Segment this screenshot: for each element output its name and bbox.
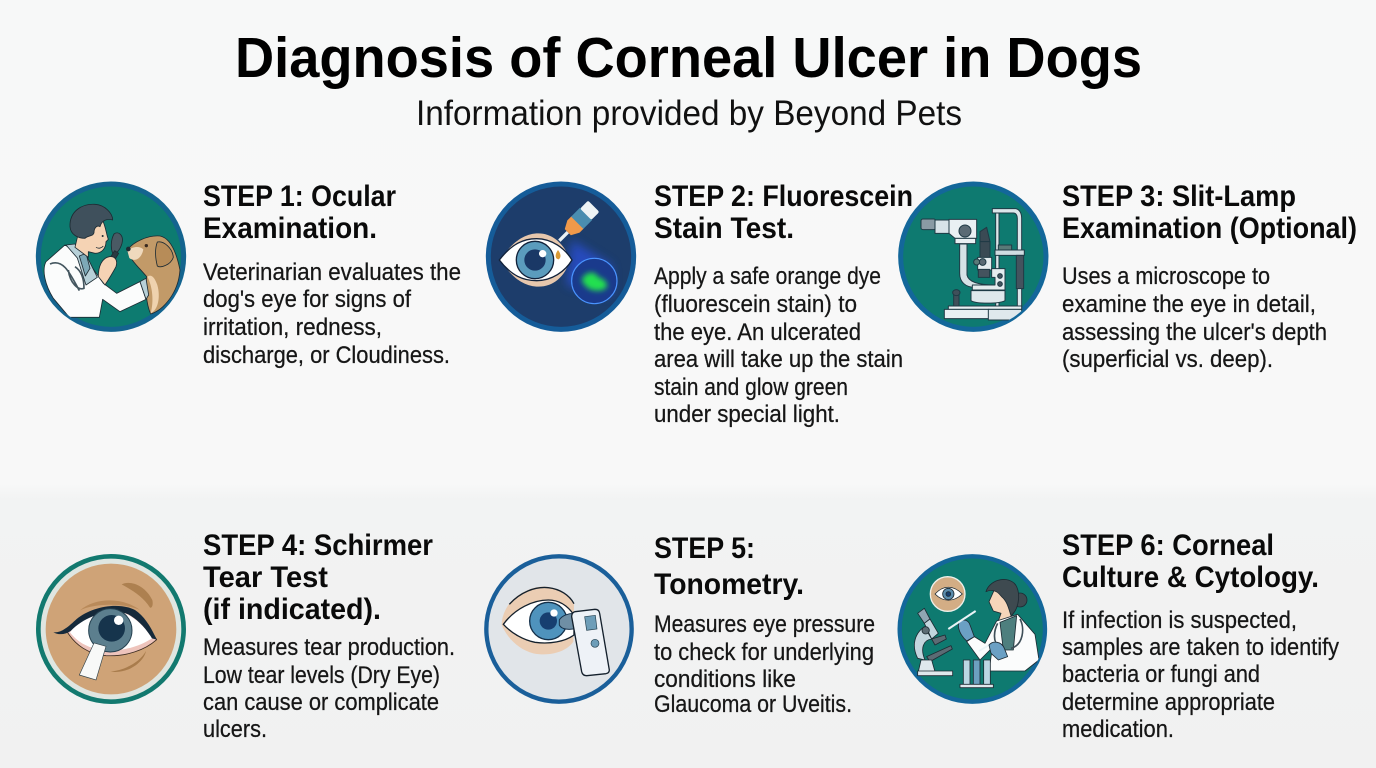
icon: lab scientist with microscope	[900, 556, 1045, 702]
text: step 5 body: Glaucoma or Uveitis.	[654, 691, 852, 718]
text: step 6 body: determine appropriate	[1062, 689, 1275, 716]
panel: step 3: Examination (Optional)	[1062, 212, 1357, 245]
text: step 4 body	[203, 634, 455, 743]
icon: Schirmer tear test	[38, 556, 184, 702]
text: step 1 body	[203, 259, 461, 369]
text: step 3 body	[1062, 263, 1327, 373]
icon: lab microscope	[914, 608, 953, 676]
text: step 4 body: Measures tear production.	[203, 634, 455, 661]
text: step 2 body: (fluorescein stain) to	[654, 291, 857, 318]
text: step 1 body: dog's eye for signs of	[203, 286, 411, 313]
panel: step 1: Examination.	[203, 212, 377, 245]
text: step 3 body: assessing the ulcer's depth	[1062, 319, 1327, 346]
text: step 4 body: Low tear levels (Dry Eye)	[203, 662, 440, 689]
text: step 1 body: irritation, redness,	[203, 314, 382, 341]
heading: step 3: STEP 3: Slit-Lamp	[1062, 180, 1296, 213]
text: step 2 body	[654, 263, 903, 428]
text: step 6 body	[1062, 607, 1339, 743]
text: step 5 body: to check for underlying	[654, 639, 874, 666]
text: step 5 body	[654, 611, 875, 718]
text: step 1 body: discharge, or Cloudiness.	[203, 342, 450, 369]
panel: step 2: Stain Test.	[654, 212, 794, 245]
icon: tonometer on eye	[486, 556, 632, 702]
panel: step 4	[38, 529, 455, 743]
panel: step 1	[38, 180, 461, 369]
heading: step 5: STEP 5:	[654, 532, 755, 565]
text: step 6 body: medication.	[1062, 716, 1174, 743]
title: Diagnosis of Corneal Ulcer in Dogs	[235, 26, 1142, 90]
text: step 4 body: can cause or complicate	[203, 689, 439, 716]
icon: dropper bottle	[558, 201, 599, 242]
heading: step 2: STEP 2: Fluorescein	[654, 180, 913, 213]
text: step 2 body: area will take up the stain	[654, 346, 903, 373]
panel: step 6: Culture & Cytology.	[1062, 561, 1319, 594]
text: step 2 body: under special light.	[654, 401, 840, 428]
panel: step 4: (if indicated).	[203, 593, 381, 626]
text: step 6 body: samples are taken to identify	[1062, 634, 1339, 661]
panel: step 4: Tear Test	[203, 561, 328, 594]
panel: step 6	[900, 529, 1339, 743]
text: step 2 body: the eye. An ulcerated	[654, 319, 861, 346]
panel: step 5: Tonometry.	[654, 568, 804, 601]
text: step 3 body: (superficial vs. deep).	[1062, 346, 1273, 373]
icon: slit-lamp microscope	[901, 184, 1046, 329]
text: step 5 body: conditions like	[654, 666, 796, 693]
text: step 5 body: Measures eye pressure	[654, 611, 875, 638]
icon: veterinarian examining dog	[38, 184, 184, 329]
text: step 3 body: Uses a microscope to	[1062, 263, 1270, 290]
heading: step 6: STEP 6: Corneal	[1062, 529, 1274, 562]
text: step 2 body: stain and glow green	[654, 374, 848, 401]
icon: fluorescein stain eye	[488, 184, 634, 329]
heading: step 1: STEP 1: Ocular	[203, 180, 396, 213]
text: step 6 body: bacteria or fungi and	[1062, 661, 1260, 688]
text: step 4 body: ulcers.	[203, 716, 267, 743]
panel: step 3	[901, 180, 1357, 373]
text: step 1 body: Veterinarian evaluates the	[203, 259, 461, 286]
subtitle: Information provided by Beyond Pets	[416, 94, 962, 133]
text: step 2 body: Apply a safe orange dye	[654, 263, 881, 290]
panel: step 2	[488, 180, 913, 428]
panel: step 5	[486, 532, 875, 718]
heading: step 4: STEP 4: Schirmer	[203, 529, 433, 562]
text: step 6 body: If infection is suspected,	[1062, 607, 1297, 634]
text: step 3 body: examine the eye in detail,	[1062, 291, 1316, 318]
